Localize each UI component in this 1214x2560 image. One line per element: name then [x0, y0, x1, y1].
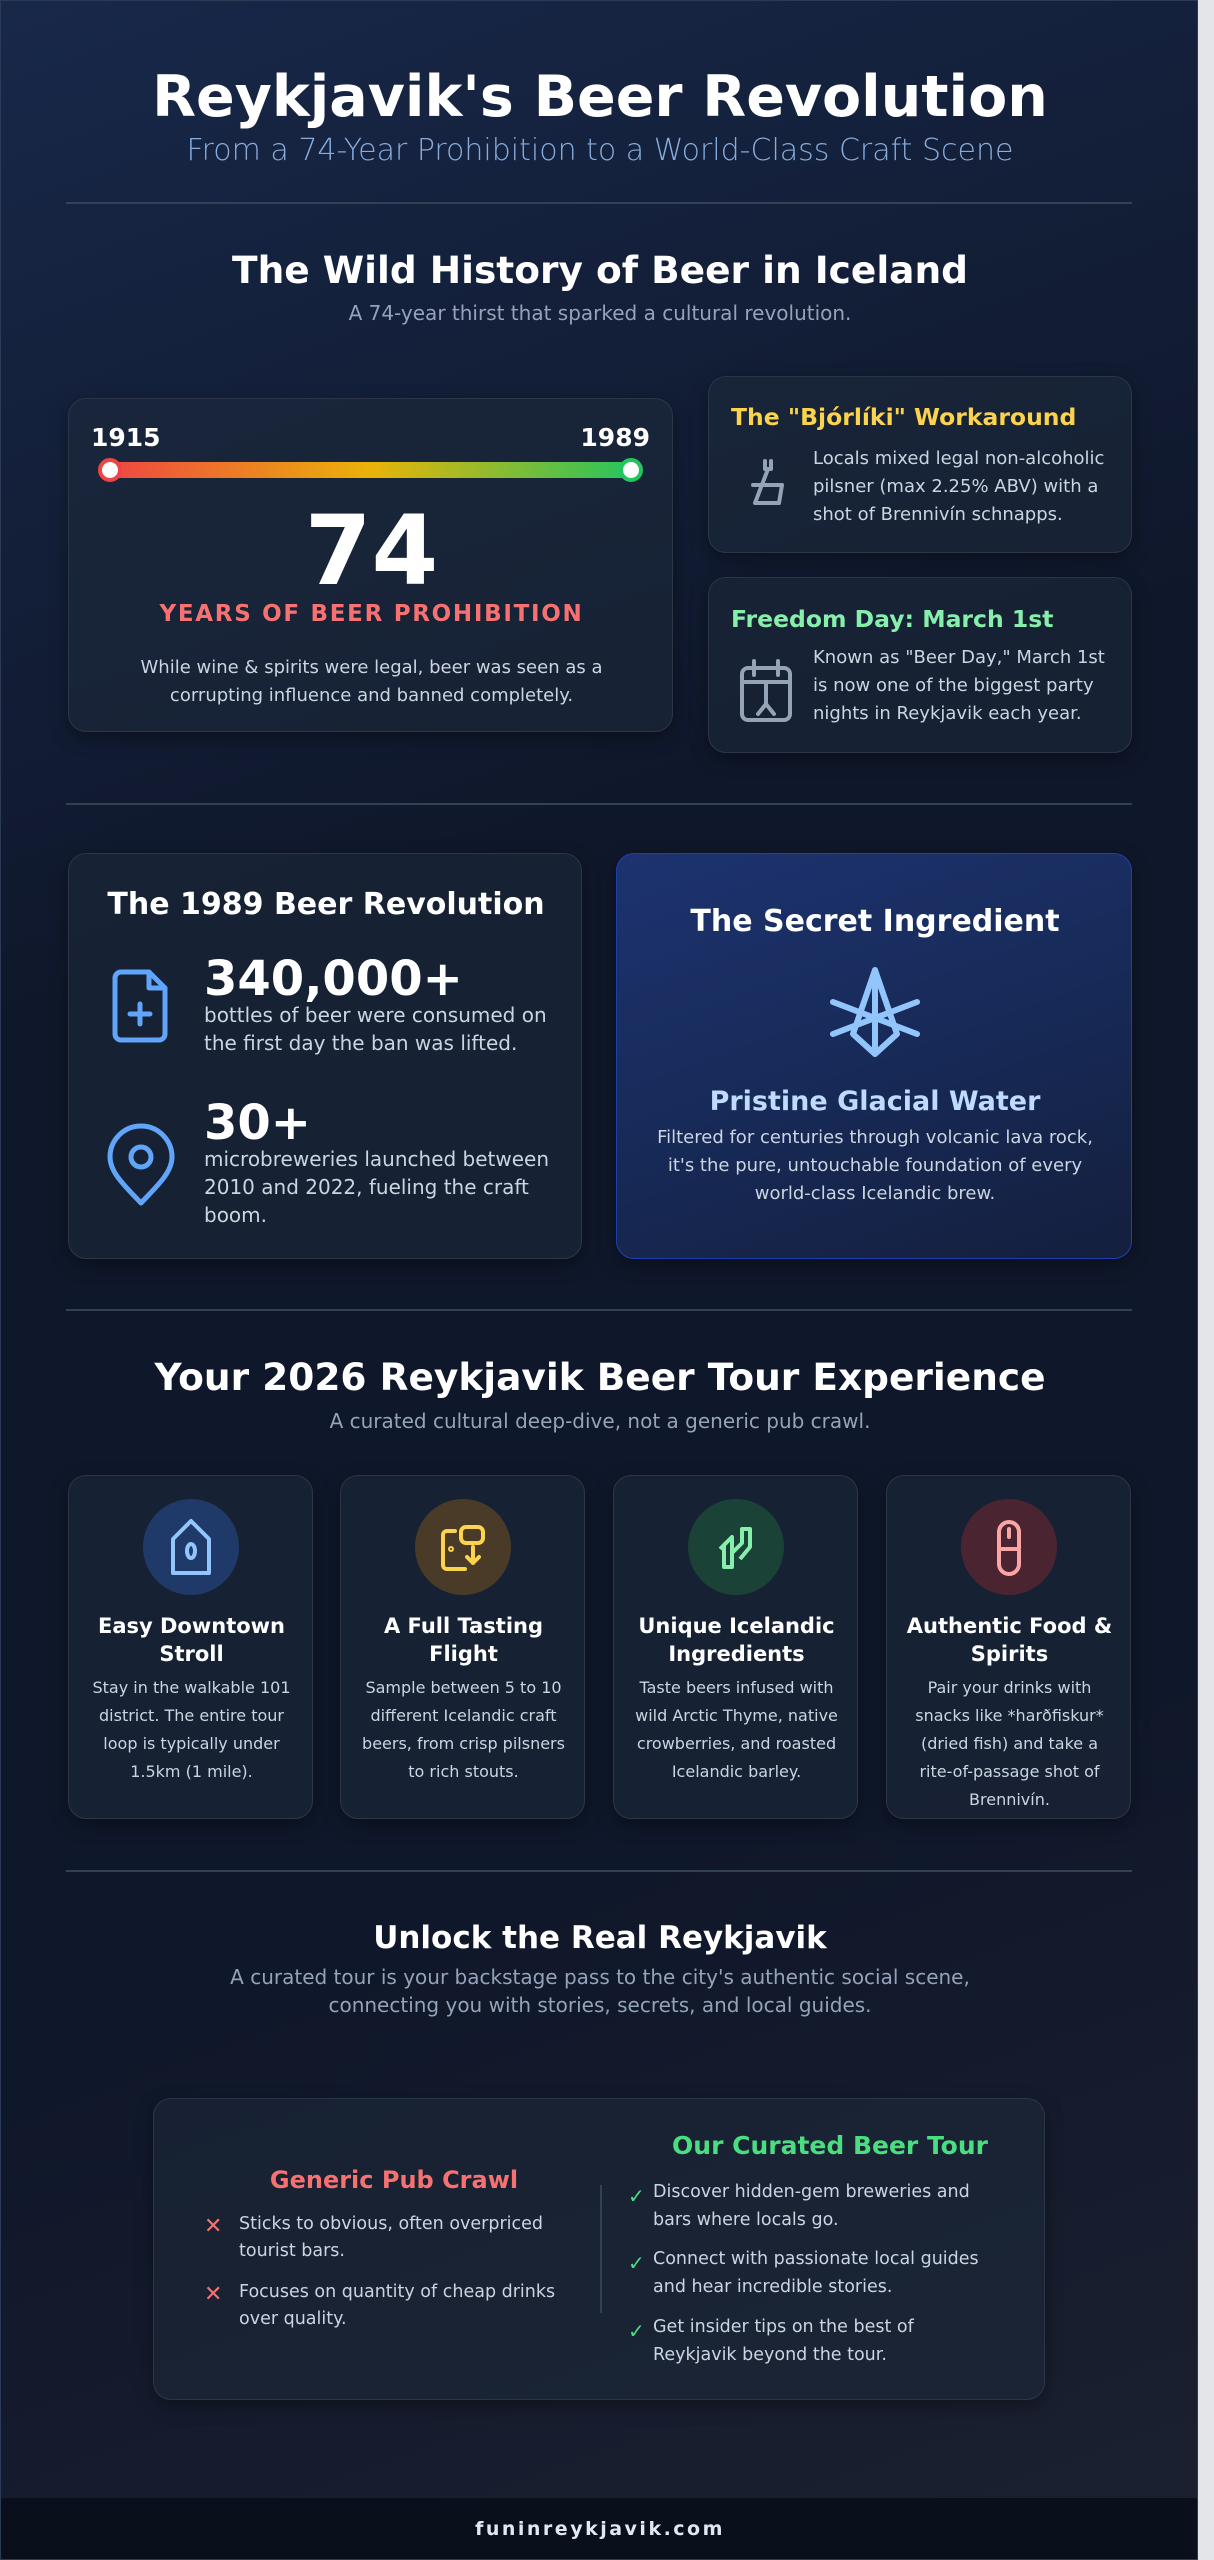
text: it's the pure, untouchable foundation of every — [668, 1155, 1082, 1176]
icon: glacier — [830, 967, 920, 1057]
heading: The Secret Ingredient — [690, 904, 1060, 939]
panel: icelandic ingredients — [613, 1475, 858, 1819]
stat text: 2010 and 2022, fueling the craft — [204, 1175, 529, 1199]
panel: comparison: ✓ — [628, 2184, 645, 2208]
timeline bar — [102, 462, 639, 478]
text: Filtered for centuries through volcanic lava rock, — [657, 1127, 1093, 1148]
description: While wine & spirits were legal, beer was seen as a — [140, 657, 602, 678]
text: Stay in the walkable 101 district. The entire tour loop is typically under 1.5km (1 mile). — [92, 1678, 290, 1781]
text — [657, 1127, 1093, 1204]
text: Taste beers infused with wild Arctic Thyme, native crowberries, and roasted Icelandic barley. — [635, 1678, 838, 1781]
stat text: the first day the ban was lifted. — [204, 1031, 517, 1055]
title: Stroll — [159, 1642, 224, 1666]
description: corrupting influence and banned completely. — [170, 685, 573, 706]
stat text — [204, 1003, 547, 1055]
big number 74: 74 — [305, 495, 438, 607]
panel: comparison: Connect with passionate local guides and hear incredible stories. — [653, 2249, 979, 2297]
panel: secret ingredient — [616, 853, 1132, 1259]
description — [140, 657, 602, 706]
panel: comparison: ✕ — [204, 2282, 222, 2307]
panel: comparison: ✓ — [628, 2251, 645, 2275]
title — [98, 1614, 285, 1666]
panel: comparison: Focuses on quantity of cheap drinks over quality. — [239, 2282, 555, 2329]
title: Reykjavik's Beer Revolution — [152, 64, 1048, 130]
stat text: bottles of beer were consumed on — [204, 1003, 547, 1027]
section subheading: unlock: A curated tour is your backstage pass to the city's authentic social scene, — [230, 1965, 970, 1989]
title: Ingredients — [668, 1642, 805, 1666]
title: Easy Downtown — [98, 1614, 285, 1638]
title: Spirits — [971, 1642, 1048, 1666]
panel: comparison: Get insider tips on the best of Reykjavik beyond the tour. — [653, 2317, 914, 2365]
panel: food and spirits — [886, 1475, 1131, 1819]
icon: map pin — [108, 1124, 174, 1206]
section heading: history: The Wild History of Beer in Iceland — [232, 248, 968, 292]
list: curated — [628, 2182, 979, 2365]
panel: 74 years of prohibition — [68, 398, 673, 732]
heading: The "Bjórlíki" Workaround — [731, 403, 1076, 431]
panel: comparison — [153, 2098, 1045, 2400]
title — [638, 1614, 835, 1666]
list: generic — [204, 2214, 555, 2329]
stat text: boom. — [204, 1203, 267, 1227]
section heading: unlock: Unlock the Real Reykjavik — [373, 1920, 827, 1956]
title — [384, 1614, 543, 1666]
heading: generic pub crawl: Generic Pub Crawl — [270, 2166, 518, 2194]
stat text: microbreweries launched between — [204, 1147, 549, 1171]
panel: comparison: Discover hidden-gem breweries and bars where locals go. — [653, 2182, 970, 2230]
panel: 1989 beer revolution — [68, 853, 582, 1259]
subtitle: From a 74-Year Prohibition to a World-Class Craft Scene — [187, 133, 1013, 168]
panel: comparison: Sticks to obvious, often overpriced tourist bars. — [239, 2214, 543, 2261]
icon: cocktail glass — [751, 459, 784, 505]
heading: Freedom Day: March 1st — [731, 605, 1053, 633]
section subheading: tour: A curated cultural deep-dive, not a generic pub crawl. — [330, 1409, 870, 1433]
icon: herbs — [688, 1499, 784, 1595]
footer — [1, 2498, 1199, 2560]
icon: house — [143, 1499, 239, 1595]
subheading: Pristine Glacial Water — [710, 1086, 1040, 1117]
stat: 340,000+: 340,000+ — [204, 951, 463, 1007]
panel: Bjorliki workaround — [708, 376, 1132, 553]
label: 1989: 1989 — [580, 423, 650, 452]
section subheading: unlock — [230, 1965, 970, 2017]
section subheading: history: A 74-year thirst that sparked a cultural revolution. — [349, 301, 851, 325]
title: Flight — [429, 1642, 498, 1666]
stat: 30+: 30+ — [204, 1095, 311, 1151]
label: years of prohibition: YEARS OF BEER PROHIBITION — [160, 601, 583, 627]
title — [906, 1614, 1112, 1666]
label: 1915: 1915 — [91, 423, 161, 452]
heading: curated tour: Our Curated Beer Tour — [672, 2131, 988, 2160]
text: Pair your drinks with snacks like *harðfiskur* (dried fish) and take a rite-of-passage shot of Brennivín. — [915, 1678, 1104, 1809]
icon: flight — [415, 1499, 511, 1595]
title: Authentic Food & — [907, 1614, 1112, 1638]
stat text — [204, 1147, 549, 1227]
section heading: tour: Your 2026 Reykjavik Beer Tour Experience — [154, 1355, 1046, 1399]
icon: file plus — [112, 970, 168, 1042]
text: Sample between 5 to 10 different Icelandic craft beers, from crisp pilsners to rich stouts. — [362, 1678, 565, 1781]
heading: The 1989 Beer Revolution — [107, 887, 545, 922]
title: A Full Tasting — [384, 1614, 543, 1638]
icon: capsule — [961, 1499, 1057, 1595]
footer: funinreykjavik.com — [475, 2518, 725, 2540]
text: world-class Icelandic brew. — [755, 1183, 995, 1204]
panel: comparison: ✕ — [204, 2214, 222, 2239]
icon: calendar — [740, 659, 792, 722]
panel: comparison: ✓ — [628, 2319, 645, 2343]
section subheading: unlock: connecting you with stories, secrets, and local guides. — [328, 1993, 872, 2017]
text: Locals mixed legal non-alcoholic pilsner (max 2.25% ABV) with a shot of Brennivín schnapps. — [813, 448, 1104, 525]
panel: Freedom day — [708, 577, 1132, 753]
text: Known as "Beer Day," March 1st is now one of the biggest party nights in Reykjavik each year. — [813, 647, 1105, 724]
panel: tasting flight — [340, 1475, 585, 1819]
panel: easy downtown stroll — [68, 1475, 313, 1819]
title: Unique Icelandic — [638, 1614, 835, 1638]
